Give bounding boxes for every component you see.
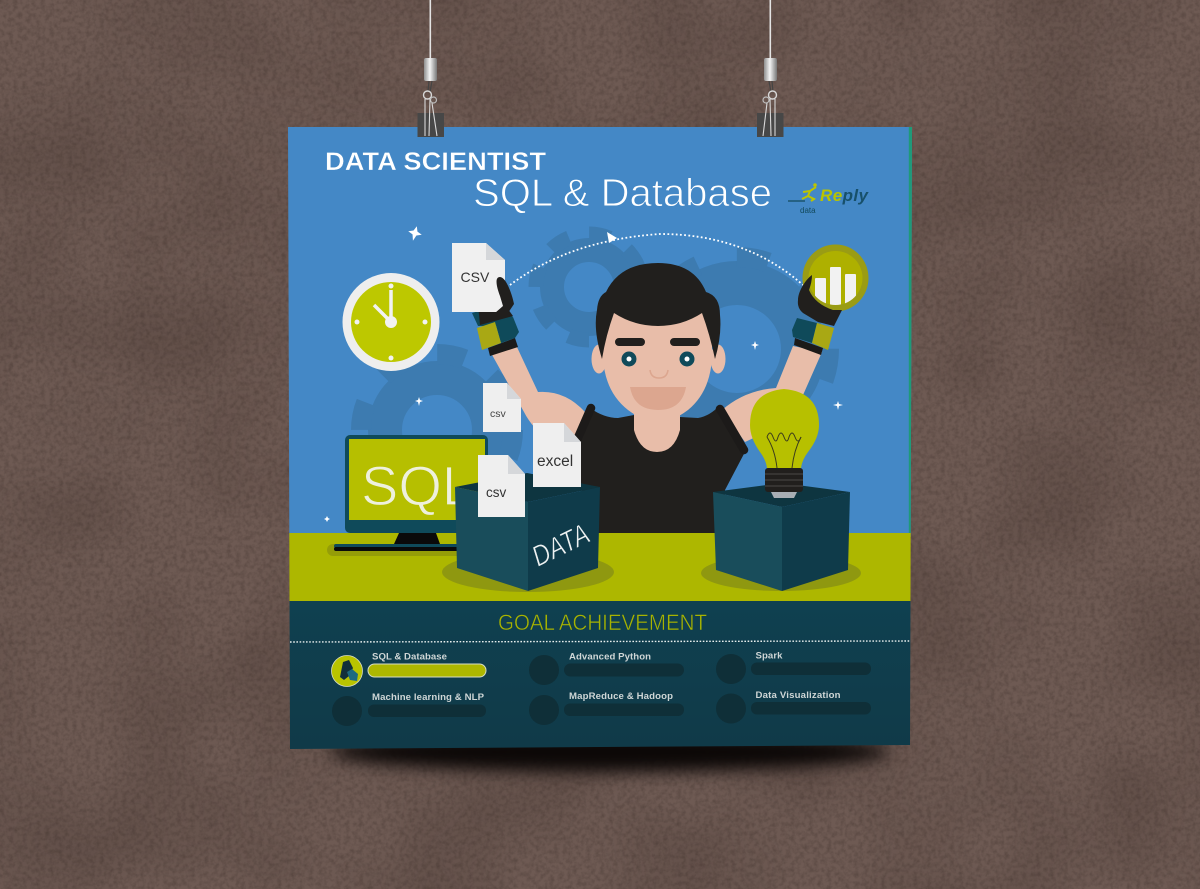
goal: Advanced Python: Advanced Python (569, 652, 651, 662)
title (325, 148, 772, 215)
goal: Spark (716, 650, 871, 684)
goal: Advanced Python (529, 652, 684, 685)
goal: Machine learning & NLP: Machine learning & NLP (372, 692, 485, 703)
document: csv small: csv (490, 408, 506, 420)
right hand (798, 275, 842, 326)
neck (634, 414, 680, 452)
document: excel: excel (537, 453, 573, 470)
hanging clip: right (757, 0, 784, 137)
panel: goal achievement (285, 601, 915, 751)
document: excel (533, 423, 581, 487)
goal: Data Visualization: Data Visualization (756, 690, 841, 701)
eyebrows (619, 338, 696, 346)
face (603, 310, 712, 422)
desk (285, 533, 915, 603)
left hand palm (478, 311, 513, 325)
box: DATA (455, 423, 600, 591)
heading: GOAL ACHIEVEMENT (498, 610, 707, 635)
title: DATA SCIENTIST (325, 148, 546, 176)
eyes (622, 352, 694, 366)
icon: bar chart badge (798, 244, 868, 326)
goal: MapReduce & Hadoop: MapReduce & Hadoop (569, 691, 673, 702)
right bracer (792, 318, 834, 355)
illustration: data scientist character (472, 263, 834, 533)
monitor with SQL: SQL (361, 454, 473, 517)
box: DATA: DATA (527, 518, 595, 573)
box with light bulb (713, 389, 850, 591)
poster (285, 127, 915, 751)
background gears (351, 226, 839, 461)
title: SQL & Database (473, 172, 772, 215)
goal: Spark: Spark (756, 650, 783, 662)
document: CSV held in hand: CSV (460, 269, 490, 285)
icon: sparkle stars (324, 224, 843, 522)
left thumb (495, 277, 514, 313)
right arm (722, 346, 822, 442)
monitor with SQL (327, 435, 488, 556)
poster drop shadow (330, 732, 890, 772)
document: CSV held in hand (452, 243, 514, 325)
logo: Reply data: Reply (820, 186, 870, 205)
hair (596, 263, 720, 359)
goal: Machine learning & NLP (332, 692, 486, 726)
left arm (492, 347, 585, 435)
left bracer (472, 312, 519, 356)
goal: MapReduce & Hadoop (529, 691, 684, 725)
ears (592, 344, 604, 374)
goal: SQL & Database (332, 652, 486, 686)
document: csv on box (478, 455, 525, 517)
icon: dotted arc arrow (510, 232, 803, 285)
icon: light bulb (750, 389, 819, 498)
document: csv small (483, 383, 521, 432)
mouth (630, 387, 686, 410)
torso (574, 405, 746, 533)
nose (650, 370, 668, 378)
logo: Reply data: data (800, 206, 816, 215)
sleeve bands (577, 408, 744, 450)
hanging clip: left (418, 0, 444, 137)
document: csv on box: csv (486, 485, 506, 500)
goal: Data Visualization (716, 690, 871, 724)
shadow under boxes (442, 560, 861, 592)
goal: SQL & Database: SQL & Database (372, 652, 447, 662)
logo: Reply data (788, 183, 870, 215)
icon: clock (342, 273, 440, 371)
